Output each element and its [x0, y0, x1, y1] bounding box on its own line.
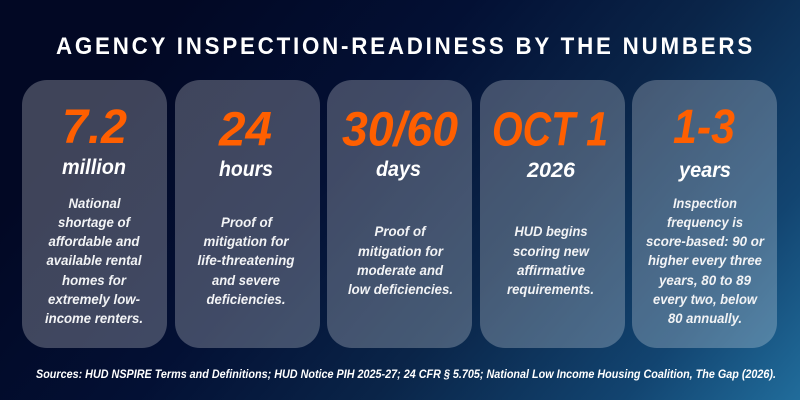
panel: 7.2 million: homes for: [62, 272, 127, 288]
title: AGENCY INSPECTION-READINESS BY THE NUMBERS: [56, 33, 755, 60]
panel: 7.2 million: affordable and: [48, 233, 140, 249]
panel: 1-3 years: Inspection: [673, 195, 737, 211]
panel: 1-3 years: years, 80 to 89: [658, 272, 751, 288]
panel: Oct 1 2026: [480, 80, 625, 348]
panel: 24 hours: and severe: [212, 272, 280, 288]
panel: 24 hours: Proof of: [221, 214, 273, 230]
panel: 30/60 days: moderate and: [357, 262, 443, 278]
panel: 7.2 million: income renters.: [45, 310, 143, 326]
panel: 24 hours: mitigation for: [204, 233, 290, 249]
panel: 30/60 days: Proof of: [374, 223, 427, 239]
panel: Oct 1 2026: HUD begins: [514, 223, 588, 239]
panel: 1-3 years: higher every three: [648, 252, 762, 268]
panel: 24 hours: hours: [219, 157, 273, 181]
panel: Oct 1 2026: requirements.: [507, 281, 594, 297]
panel: 1-3 years: every two, below: [653, 291, 758, 307]
panel: 1-3 years: 80 annually.: [668, 310, 742, 326]
panel: Oct 1 2026: affirmative: [517, 262, 585, 278]
panel: 7.2 million: shortage of: [58, 214, 131, 230]
panel: 1-3 years: frequency is: [667, 214, 743, 230]
panel: 30/60 days: low deficiencies.: [348, 281, 453, 297]
panel: 1-3 years: 1-3: [673, 101, 735, 154]
panel: 7.2 million: [22, 80, 167, 348]
panel: 7.2 million: extremely low-: [48, 291, 140, 307]
panel: Oct 1 2026: 2026: [526, 158, 576, 182]
panel: Oct 1 2026: OCT 1: [492, 104, 608, 156]
panel: 7.2 million: National: [68, 195, 122, 211]
panel: 24 hours: [175, 80, 320, 348]
panel: 7.2 million: 7.2: [62, 101, 127, 154]
panel: 1-3 years: [632, 80, 777, 348]
panel: 24 hours: deficiencies.: [206, 291, 286, 307]
panel: 7.2 million: million: [62, 155, 126, 179]
panel: 30/60 days: mitigation for: [358, 243, 444, 259]
panel: 24 hours: 24: [218, 104, 272, 156]
panel: 30/60 days: 30/60: [342, 104, 458, 156]
panel: 30/60 days: days: [376, 157, 421, 181]
panel: 30/60 days: [327, 80, 472, 348]
panel: 1-3 years: score-based: 90 or: [646, 233, 765, 249]
panel: 24 hours: life-threatening: [198, 252, 295, 268]
panel: 1-3 years: years: [678, 158, 731, 182]
panel: Oct 1 2026: scoring new: [513, 243, 590, 259]
panel: 7.2 million: available rental: [46, 252, 143, 268]
